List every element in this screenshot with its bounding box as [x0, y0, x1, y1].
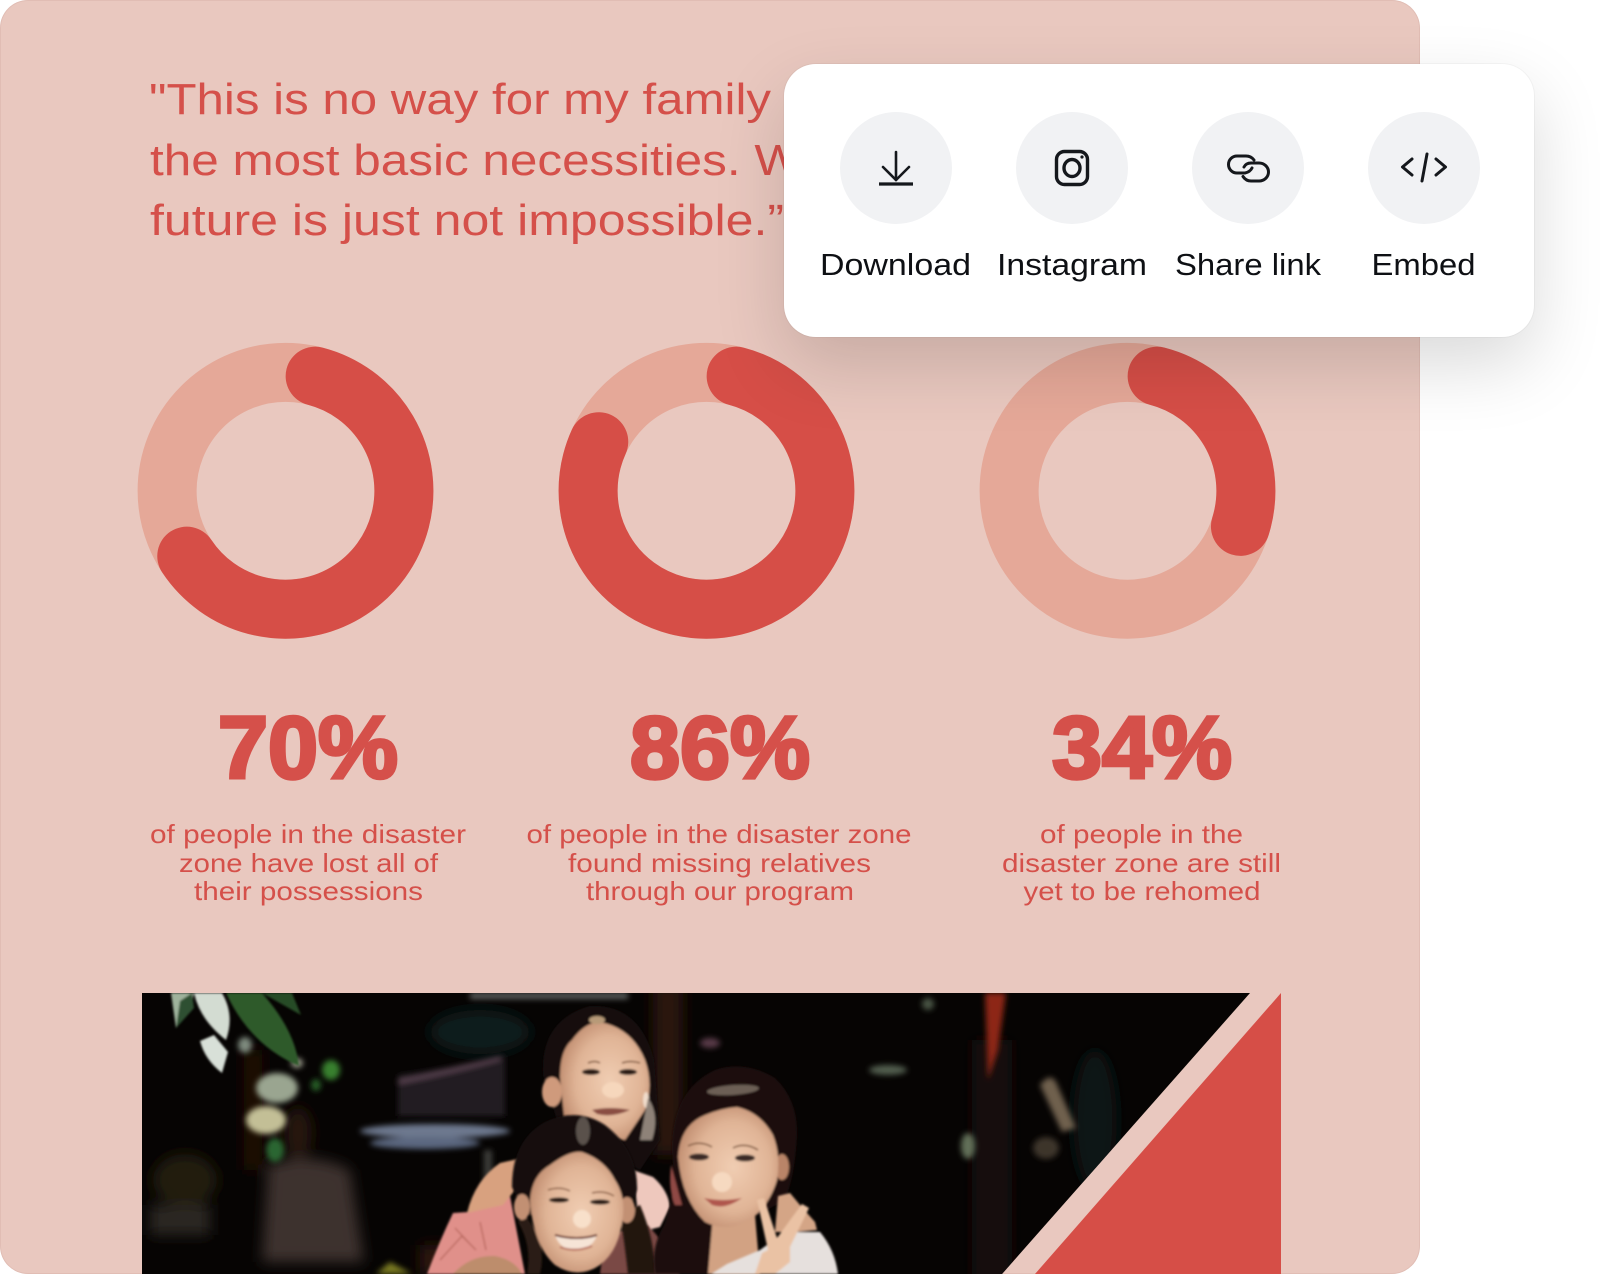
photo: pink jacket and arm	[427, 1158, 680, 1274]
photo: front girl	[512, 1115, 655, 1274]
caption: 70%: of people in the disaster	[150, 819, 466, 849]
quote text: the most basic necessities. W	[150, 136, 802, 185]
stat: 34%: 34%	[1052, 698, 1232, 797]
caption: 86%: found missing relatives	[568, 848, 871, 878]
caption: 70%: their possessions	[194, 876, 423, 906]
icon: link	[1228, 156, 1268, 181]
caption: 86%: of people in the disaster zone	[526, 819, 912, 849]
caption: 34%: disaster zone are still	[1002, 848, 1281, 878]
icon: instagram	[1056, 152, 1088, 184]
donut chart: 70%	[141, 347, 430, 635]
photo: three smiling girls	[142, 985, 1252, 1274]
quote text: future is just not impossible.”	[150, 196, 784, 245]
share option: embed: Embed	[1372, 247, 1476, 282]
stat: 86%: 86%	[630, 698, 810, 797]
decorative red triangle	[1035, 993, 1281, 1274]
share card	[784, 64, 1534, 337]
icon: code brackets	[1402, 154, 1446, 181]
photo leaves	[171, 993, 301, 1073]
share option: instagram: Instagram	[997, 247, 1147, 282]
caption: 86%	[526, 819, 912, 906]
caption: 34%: yet to be rehomed	[1024, 876, 1260, 906]
photo: white shirt and peace sign hand	[711, 1193, 838, 1274]
quote text	[149, 75, 802, 245]
photo: back girl	[542, 1006, 660, 1170]
icon: download arrow	[879, 152, 913, 184]
share option: instagram	[997, 112, 1147, 282]
quote text: "This is no way for my family	[149, 75, 771, 124]
caption: 70%: zone have lost all of	[179, 848, 439, 878]
caption: 34%	[1002, 819, 1281, 906]
share option: embed	[1368, 112, 1480, 282]
caption: 34%: of people in the	[1040, 819, 1243, 849]
photo: right girl	[654, 1066, 797, 1274]
donut chart: 34%	[983, 347, 1272, 635]
share option: share link: Share link	[1175, 247, 1322, 282]
share option: download: Download	[820, 247, 971, 282]
share option: share link	[1175, 112, 1322, 282]
share option: download	[820, 112, 971, 282]
caption: 70%	[150, 819, 466, 906]
photo background	[150, 985, 1117, 1274]
stat: 70%: 70%	[218, 698, 398, 797]
donut chart: 86%	[562, 347, 851, 635]
caption: 86%: through our program	[586, 876, 854, 906]
